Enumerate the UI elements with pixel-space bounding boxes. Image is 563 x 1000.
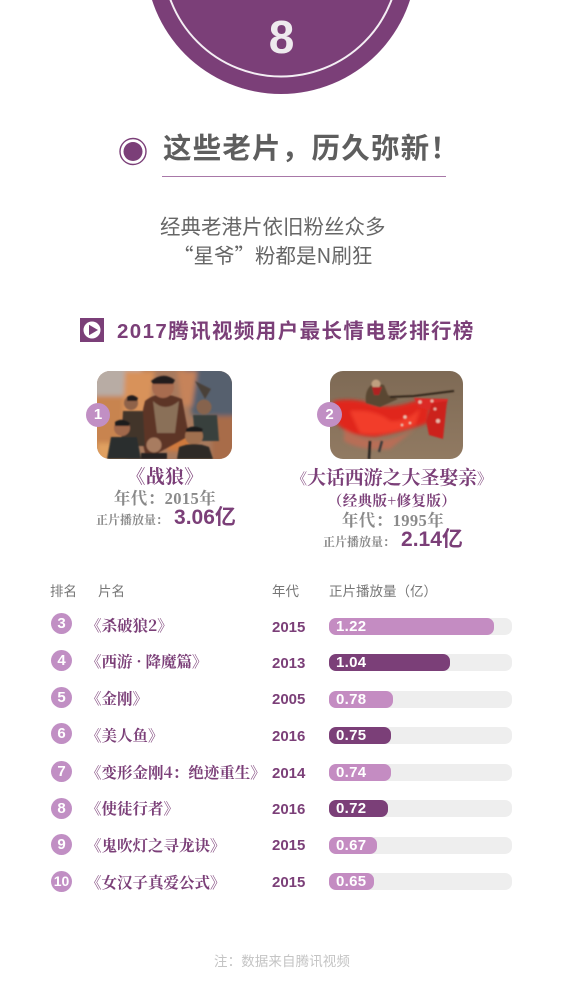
bar 0.65: 0.65 bbox=[336, 873, 366, 890]
text: 2005 bbox=[272, 691, 305, 708]
table row 9 bbox=[51, 834, 512, 856]
heading underline bbox=[162, 176, 446, 177]
text: 《使徒行者》 bbox=[86, 797, 179, 819]
table row 5 bbox=[51, 687, 512, 709]
rank badge 2 bbox=[317, 402, 342, 427]
icon: play square bbox=[80, 318, 104, 342]
text: 《女汉子真爱公式》 bbox=[86, 871, 226, 893]
table header: 年代 bbox=[272, 584, 299, 599]
text: 9 bbox=[57, 836, 66, 853]
panel: rank 2 movie bbox=[292, 371, 492, 551]
bar 1.22: 1.22 bbox=[336, 618, 366, 635]
text: 《西游 · 降魔篇》 bbox=[86, 650, 207, 672]
bar 0.75: 0.75 bbox=[336, 727, 366, 744]
text: 5 bbox=[57, 689, 66, 706]
text: 2015 bbox=[272, 619, 305, 636]
rank badge 2: 2 bbox=[325, 406, 334, 423]
text: 2014 bbox=[272, 765, 305, 782]
table row 8 bbox=[51, 797, 512, 819]
intro text bbox=[160, 216, 386, 269]
text: 2016 bbox=[272, 728, 305, 745]
text: 2015 bbox=[272, 837, 305, 854]
table header: 排名 bbox=[50, 584, 77, 599]
text: 《鬼吹灯之寻龙诀》 bbox=[86, 834, 226, 856]
table row 3 bbox=[51, 613, 512, 636]
table row 10 bbox=[51, 871, 512, 893]
text: 8 bbox=[57, 800, 66, 817]
movie year: 年代：1995年 bbox=[342, 511, 444, 530]
chart heading with play icon bbox=[80, 318, 475, 343]
play count: 正片播放量： 3.06亿 bbox=[96, 506, 236, 529]
movie title: 《战狼》 bbox=[126, 462, 204, 489]
intro text: 经典老港片依旧粉丝众多 bbox=[160, 216, 386, 239]
section heading: 这些老片，历久弥新！ bbox=[163, 133, 460, 165]
rank badge 1: 1 bbox=[94, 406, 102, 423]
bar 0.75 bbox=[329, 727, 512, 744]
top badge: purple circle with number 8: 8 bbox=[269, 11, 294, 63]
table header: 正片播放量（亿） bbox=[329, 584, 437, 599]
movie title: 《大话西游之大圣娶亲》 bbox=[292, 463, 492, 490]
bar 1.22 bbox=[329, 618, 512, 635]
rank badge 1 bbox=[86, 403, 110, 427]
top badge: purple circle with number 8 bbox=[152, 0, 410, 94]
bar 1.04 bbox=[329, 654, 512, 671]
bar 1.04: 1.04 bbox=[336, 654, 366, 671]
table header bbox=[50, 584, 437, 599]
bar 0.78 bbox=[329, 691, 512, 708]
table row 6 bbox=[51, 723, 512, 746]
text: 2015 bbox=[272, 874, 305, 891]
text: 《金刚》 bbox=[86, 687, 148, 709]
text: 3 bbox=[57, 615, 66, 632]
table row 4 bbox=[51, 650, 512, 672]
text: 2013 bbox=[272, 655, 305, 672]
text: 2016 bbox=[272, 801, 305, 818]
poster: war movie bbox=[97, 371, 232, 459]
icon: section bullet ring bbox=[119, 138, 147, 166]
text: 《变形金刚4：绝迹重生》 bbox=[86, 761, 266, 783]
movie year: 年代：2015年 bbox=[114, 489, 216, 508]
bar 0.67: 0.67 bbox=[336, 837, 366, 854]
table header: 片名 bbox=[98, 584, 125, 599]
text: 《美人鱼》 bbox=[86, 724, 164, 746]
bar 0.72 bbox=[329, 800, 512, 817]
panel: rank 1 movie bbox=[86, 371, 236, 529]
intro text: “星爷”粉都是N刷狂 bbox=[173, 239, 372, 269]
bar 0.78: 0.78 bbox=[336, 691, 366, 708]
text: 10 bbox=[54, 873, 69, 889]
bar 0.74: 0.74 bbox=[336, 764, 366, 781]
text: 4 bbox=[57, 652, 66, 669]
bar 0.74 bbox=[329, 764, 512, 781]
bar 0.72: 0.72 bbox=[336, 800, 366, 817]
chart title: 2017腾讯视频用户最长情电影排行榜 bbox=[117, 320, 475, 343]
movie edition: （经典版+修复版） bbox=[328, 490, 456, 511]
text: 7 bbox=[57, 763, 66, 780]
footnote: 注：数据来自腾讯视频 bbox=[214, 954, 350, 969]
poster: red dress bbox=[330, 371, 463, 459]
bar 0.65 bbox=[329, 873, 512, 890]
bar 0.67 bbox=[329, 837, 512, 854]
table row 7 bbox=[51, 761, 512, 783]
play count: 正片播放量： 2.14亿 bbox=[323, 528, 463, 551]
text: 6 bbox=[57, 725, 66, 742]
text: 《杀破狼2》 bbox=[86, 614, 173, 636]
